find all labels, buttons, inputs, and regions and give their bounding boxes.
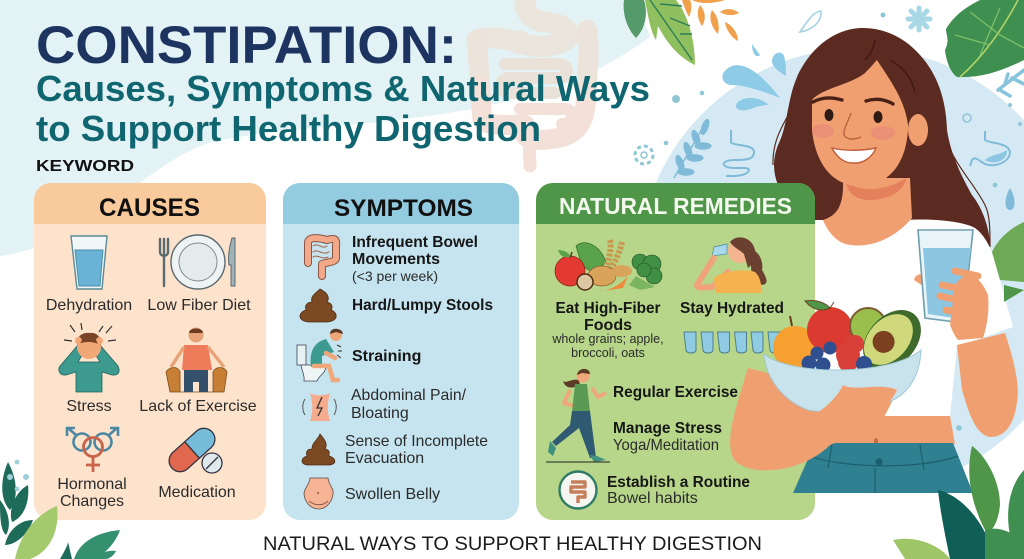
label: hormonal changes line 2: Changes — [60, 493, 124, 510]
icon: runner — [546, 369, 610, 462]
icon: high fiber foods — [555, 240, 662, 292]
icon: abdominal pain — [303, 393, 336, 421]
text: straining: Straining — [352, 348, 421, 365]
text: food examples line 2: broccoli, oats — [571, 346, 645, 360]
navel — [874, 438, 878, 446]
icon: plate and cutlery — [160, 235, 235, 289]
text: less than 3 per week: (<3 per week) — [352, 268, 438, 284]
text: establish a routine: Establish a Routine — [607, 474, 750, 491]
jeans — [793, 443, 973, 493]
causes panel body — [34, 183, 266, 520]
decorative blue branch: top right — [998, 70, 1024, 96]
midriff — [815, 416, 955, 444]
decorative blue dots and flower — [635, 12, 1022, 431]
text: foods: Foods — [584, 317, 632, 334]
icon: stressed person — [59, 323, 119, 392]
icon: woman drinking water — [697, 237, 766, 293]
causes heading: CAUSES — [99, 194, 200, 222]
icon: hormone symbols — [67, 428, 118, 472]
text: sense of incomplete evacuation: Sense of Incomplete — [345, 433, 488, 450]
label: lack of exercise: Lack of Exercise — [139, 398, 257, 415]
icon: large intestine — [308, 238, 336, 276]
decorative dots: bottom left — [7, 460, 29, 491]
title line: constipation: CONSTIPATION: — [36, 16, 457, 75]
fruit: avocado — [851, 299, 933, 381]
symptoms panel body — [283, 183, 519, 520]
decorative water splash — [722, 44, 786, 110]
icon: sitting person on armchair — [166, 328, 227, 392]
background blob: top left — [0, 0, 650, 256]
text: hard lumpy stools: Hard/Lumpy Stools — [352, 297, 493, 314]
neck shadow — [846, 178, 906, 200]
fruit: berries — [802, 335, 872, 372]
text: movements: Movements — [352, 251, 440, 268]
eyebrows — [813, 98, 893, 104]
nose — [844, 113, 861, 139]
subtitle line 2: to Support Healthy Digestion — [36, 108, 541, 149]
ear — [908, 114, 928, 146]
decorative leaves: top centre — [624, 0, 695, 65]
decorative leaf branch — [674, 118, 711, 178]
subtitle line 1: Causes, Symptoms & Natural Ways — [36, 68, 650, 109]
panel: causes — [34, 183, 266, 520]
left arm — [730, 368, 897, 470]
icon: stool 2 — [302, 434, 335, 465]
text: abdominal pain: Abdominal Pain/ — [351, 387, 467, 404]
panel: natural remedies — [536, 183, 815, 520]
text: food examples: whole grains; apple, — [551, 332, 664, 346]
keyword label: KEYWORD — [36, 158, 134, 175]
symptoms heading: SYMPTOMS — [334, 195, 473, 222]
remedies panel body — [536, 183, 815, 520]
bowl — [764, 350, 921, 412]
text: yoga meditation: Yoga/Meditation — [613, 437, 719, 454]
text: regular exercise: Regular Exercise — [613, 384, 738, 401]
text: swollen belly: Swollen Belly — [345, 486, 440, 503]
fruit: orange — [773, 326, 817, 370]
hair strand detail — [865, 40, 915, 92]
label: low fiber diet: Low Fiber Diet — [147, 297, 251, 314]
arm with glass hand — [957, 333, 1018, 437]
symptoms panel header — [283, 183, 519, 224]
background circle behind woman — [638, 48, 1024, 492]
text: evacuation: Evacuation — [345, 450, 424, 467]
decorative leaf: right middle — [992, 222, 1024, 302]
icon: glass of water — [71, 236, 107, 289]
decorative monstera leaf: top right — [945, 0, 1024, 77]
hand under bowl — [818, 385, 897, 436]
decorative gut outline icon — [724, 130, 754, 176]
text: stay hydrated: Stay Hydrated — [680, 300, 784, 317]
shirt — [815, 219, 1013, 416]
decorative leaves: bottom left — [0, 462, 120, 559]
icon: stool — [300, 289, 336, 322]
glass of water — [918, 230, 973, 323]
hand holding glass — [940, 271, 988, 340]
eyes — [824, 109, 882, 123]
label: hormonal changes: Hormonal — [57, 476, 127, 493]
decorative leaf outline icon — [800, 11, 821, 32]
text: manage stress: Manage Stress — [613, 420, 722, 437]
mouth — [832, 148, 876, 163]
icon: gut clock — [560, 472, 596, 508]
icon: swollen belly — [304, 478, 333, 509]
icon: capsule and tablet — [165, 424, 222, 476]
decorative leaves: bottom right — [893, 446, 1024, 559]
panel: symptoms — [283, 183, 519, 520]
icon: person straining on toilet — [297, 329, 343, 381]
neck — [823, 178, 912, 246]
decorative ring — [963, 114, 971, 122]
fruit: kiwi — [850, 308, 886, 344]
decorative water drop — [1006, 188, 1014, 210]
label: medication: Medication — [158, 484, 236, 501]
hair back — [774, 28, 990, 247]
fruit bowl — [764, 299, 933, 412]
thumb behind glass — [914, 274, 932, 292]
remedies heading: NATURAL REMEDIES — [559, 193, 792, 219]
icon: six glasses of water — [684, 332, 780, 353]
decorative stomach icon — [970, 131, 1010, 166]
causes panel header — [34, 183, 266, 224]
text: bloating: Bloating — [351, 405, 409, 422]
label: stress: Stress — [66, 398, 112, 415]
background illustration: digestive system — [477, 0, 589, 166]
label: dehydration: Dehydration — [46, 297, 132, 314]
decorative snowflake flower — [908, 8, 930, 30]
cheeks — [812, 124, 895, 140]
hair wave outlines — [773, 102, 990, 247]
decorative orange branch — [682, 0, 739, 41]
footer text: NATURAL WAYS TO SUPPORT HEALTHY DIGESTION — [263, 534, 762, 555]
face — [812, 60, 908, 186]
fruit: apple — [805, 301, 853, 353]
title — [36, 16, 650, 175]
remedies panel header — [536, 183, 815, 224]
woman illustration — [730, 40, 1018, 493]
text: eat high-fiber foods: Eat High-Fiber — [556, 300, 660, 317]
text: infrequent bowel movements: Infrequent Bowel — [352, 234, 478, 251]
text: bowel habits: Bowel habits — [607, 490, 698, 507]
